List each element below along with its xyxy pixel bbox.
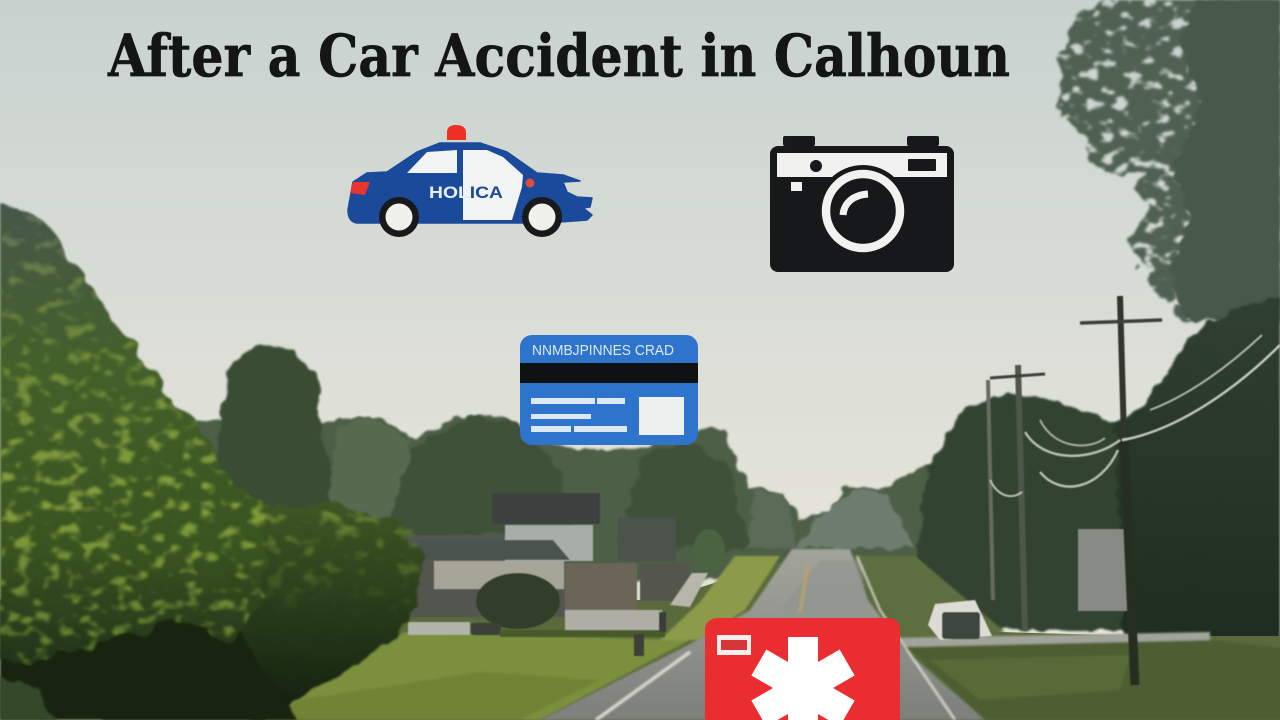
icon: insurance card [520,335,698,445]
background: utility poles and wires [988,296,1280,685]
background: distant tree line [150,342,930,590]
icon: insurance card: NNMBJPINNES CRAD [532,342,674,359]
icon: camera [770,136,954,272]
background: parked car [928,600,992,640]
background: houses [408,493,725,656]
background: left tree mass [0,203,423,720]
icon: police car [348,125,592,237]
background: upper right tree [1053,0,1280,330]
title: After a Car Accident in Calhoun [107,22,1010,90]
background: right tree masses [914,290,1280,660]
background: building at right [1078,529,1128,611]
background: grass ground [250,556,1280,720]
icon: medical kit [705,618,900,720]
icon: police car: HOL ICA [429,183,503,202]
background: road [540,549,985,720]
background: base ground [250,556,1280,720]
